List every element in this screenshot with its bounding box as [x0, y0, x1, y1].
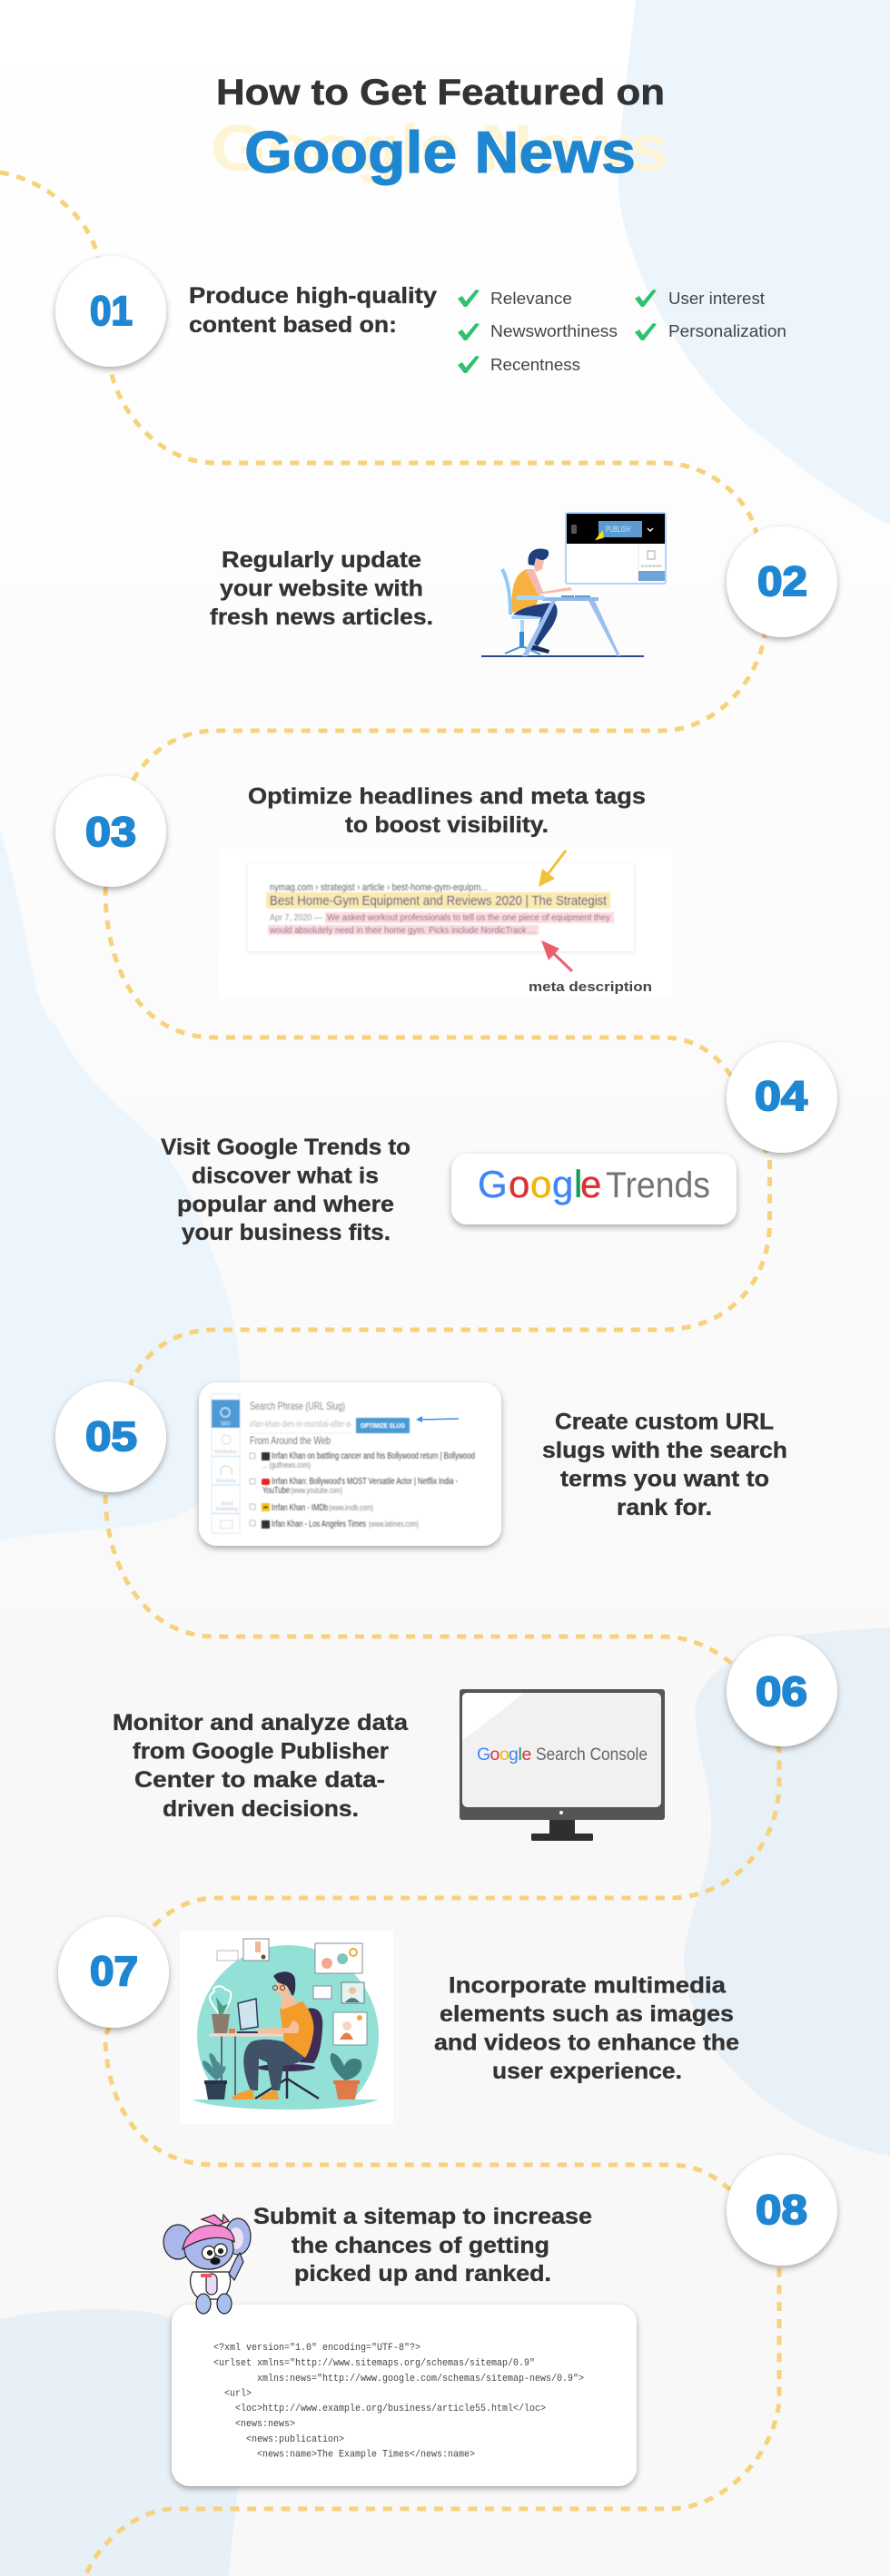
checklist [458, 290, 786, 374]
publish window: PUBLISH [606, 525, 630, 534]
step 02 text: your website with [220, 575, 423, 601]
checklist: Recentness [490, 356, 580, 374]
step 07 text: elements such as images [440, 2001, 734, 2027]
Google Trends logo card: Trends [606, 1165, 710, 1205]
monitor with Google Search Console: G [477, 1745, 490, 1765]
number badge 05 [55, 1381, 166, 1492]
Google Trends logo card: l [574, 1163, 582, 1205]
step 01 text: content based on: [189, 312, 397, 338]
step 05 text: Create custom URL [555, 1409, 774, 1434]
number badge 06 [727, 1636, 837, 1746]
number badge 02: 02 [757, 558, 807, 605]
publish window: Comments [641, 564, 663, 568]
title [211, 73, 669, 185]
sitemap code card: <loc>http://www.example.org/business/article55.html</loc> [235, 2404, 546, 2414]
monitor with Google Search Console [460, 1689, 665, 1841]
checklist: Newsworthiness [490, 322, 618, 340]
number badge 03 [55, 776, 166, 887]
search result screenshot [219, 849, 672, 998]
URL slug screenshot card: (www.youtube.com) [291, 1486, 342, 1495]
step 05 text [542, 1409, 787, 1520]
Google Trends logo card [451, 1154, 737, 1224]
step 04 text: your business fits. [182, 1220, 391, 1245]
step 06 text: from Google Publisher [133, 1739, 389, 1765]
monitor with Google Search Console: Search Console [536, 1745, 648, 1765]
step 03 text: to boost visibility. [345, 812, 549, 838]
number badge 07 [58, 1917, 169, 2028]
search result screenshot: Apr 7, 2020 — [270, 913, 322, 923]
Google Trends logo card: o [509, 1163, 529, 1205]
step 06 text: Monitor and analyze data [113, 1710, 409, 1735]
URL slug screenshot card: Irfan Khan - Los Angeles Times [272, 1519, 366, 1529]
step 05 text: rank for. [617, 1495, 712, 1520]
number badge 06: 06 [756, 1668, 807, 1715]
number badge 04 [727, 1042, 837, 1153]
step 07 text: user experience. [492, 2059, 682, 2084]
search result screenshot: nymag.com › strategist › article › best-home-gym-equipm... [270, 882, 488, 893]
illustration: person at desk [481, 549, 644, 656]
picture frames [217, 1939, 367, 2045]
number badge 01: 01 [90, 288, 133, 334]
Google Trends logo card: o [530, 1163, 551, 1205]
sitemap code card: <?xml version="1.0" encoding="UTF-8"?> [213, 2343, 420, 2354]
step 02 [210, 513, 837, 656]
number badge 07: 07 [90, 1948, 138, 1994]
step 02 text: fresh news articles. [210, 605, 433, 630]
title: Google News [211, 113, 669, 185]
URL slug screenshot card: From Around the Web [250, 1434, 331, 1447]
step 07 text: Incorporate multimedia [449, 1973, 727, 1999]
step 05 [55, 1381, 787, 1546]
arrow: blue [416, 1416, 459, 1422]
step 03 text: Optimize headlines and meta tags [248, 784, 646, 810]
URL slug screenshot card: Irrfan Khan on battling cancer and his Bollywood return | Bollywood [272, 1451, 475, 1461]
step 08 [163, 2155, 837, 2486]
URL slug screenshot card: (www.latimes.com) [369, 1519, 419, 1529]
number badge 05: 05 [85, 1413, 137, 1460]
step 04 text: popular and where [177, 1192, 394, 1217]
URL slug screenshot card: Discovery [216, 1479, 236, 1484]
number badge 04: 04 [755, 1073, 807, 1119]
monitor with Google Search Console: l [518, 1745, 522, 1765]
illustration: person at computer [180, 1931, 393, 2124]
step 08 text: picked up and ranked. [294, 2261, 551, 2286]
URL slug screenshot card: (www.imdb.com) [329, 1503, 373, 1512]
step 08 text: the chances of getting [292, 2233, 549, 2258]
monitor with Google Search Console: o [490, 1745, 499, 1765]
Google Trends logo card: G [478, 1163, 508, 1205]
step 04 text [161, 1135, 410, 1245]
URL slug screenshot card: Social [221, 1501, 233, 1507]
number badge 08: 08 [756, 2187, 807, 2233]
step 06 text: Center to make data- [134, 1767, 385, 1793]
checklist: Relevance [490, 290, 572, 308]
checklist: User interest [668, 290, 765, 308]
step 06 [113, 1636, 837, 1841]
laptop [237, 1999, 275, 2033]
label: meta description: meta description [529, 979, 652, 995]
sitemap code card: <news:news> [235, 2419, 295, 2430]
publish window [566, 513, 666, 584]
URL slug screenshot card [199, 1382, 501, 1546]
sitemap code card [172, 2305, 637, 2486]
step 01 [55, 256, 786, 374]
step 05 text: slugs with the search [542, 1438, 787, 1463]
arrow: red [541, 940, 572, 971]
URL slug screenshot card: ... (gulfnews.com) [262, 1460, 311, 1470]
sitemap code card: <news:name>The Example Times</news:name> [257, 2449, 475, 2460]
person [232, 1971, 313, 2099]
step 05 text: terms you want to [560, 1467, 769, 1492]
step 06 text [113, 1710, 409, 1822]
step 07 text: and videos to enhance the [434, 2030, 739, 2055]
search result screenshot: would absolutely need in their home gym. Picks include NordicTrack ... [269, 926, 536, 936]
monitor with Google Search Console: g [509, 1745, 519, 1765]
sitemap code card: <url> [224, 2389, 252, 2400]
number badge 01 [55, 256, 166, 367]
step 08 text: Submit a sitemap to increase [253, 2204, 592, 2229]
sitemap code card: <urlset xmlns="http://www.sitemaps.org/schemas/sitemap/0.9" [213, 2358, 535, 2369]
number badge 03: 03 [85, 809, 136, 855]
arrow: yellow [539, 850, 566, 887]
monitor with Google Search Console: e [521, 1745, 531, 1765]
desk [209, 2029, 304, 2099]
step 03 text [248, 784, 646, 838]
step 04 text: discover what is [192, 1164, 379, 1189]
chair [255, 2008, 322, 2099]
number badge 02 [727, 526, 837, 637]
step 01 text: Produce high-quality [189, 283, 437, 309]
URL slug screenshot card: OPTIMIZE SLUG [361, 1421, 405, 1430]
step 01 text [189, 283, 437, 338]
URL slug screenshot card: Search Phrase (URL Slug) [250, 1400, 345, 1412]
monitor with Google Search Console: o [499, 1745, 509, 1765]
step 07 text [434, 1973, 739, 2084]
URL slug screenshot card: Distribution [214, 1450, 237, 1455]
URL slug screenshot card: Irrfan Khan - IMDb [272, 1503, 328, 1513]
checklist: Personalization [668, 322, 786, 340]
step 08 text [253, 2204, 592, 2286]
sitemap code card: xmlns:news="http://www.google.com/schemas/sitemap-news/0.9"> [257, 2374, 584, 2384]
title: Google News [244, 119, 636, 185]
number badge 08 [727, 2155, 837, 2266]
Google Trends logo card: e [580, 1163, 601, 1205]
floor plants [203, 2053, 361, 2099]
title: How to Get Featured on [216, 73, 665, 113]
search result screenshot: We asked workout professionals to tell us the one piece of equipment they [327, 913, 610, 923]
search result screenshot: Best Home-Gym Equipment and Reviews 2020 | The Strategist [270, 893, 608, 909]
step 02 text: Regularly update [222, 547, 421, 573]
URL slug screenshot card: Scheduling [215, 1507, 238, 1512]
mascot [163, 2215, 251, 2314]
Google Trends logo card: g [552, 1163, 573, 1205]
step 06 text: driven decisions. [163, 1796, 359, 1822]
URL slug screenshot card: SEO [221, 1421, 231, 1427]
desk plant [210, 1986, 231, 2033]
step 02 text [210, 547, 433, 630]
URL slug screenshot card: Irrfan Khan: Bollywood's MOST Versatile Actor | Netflix India - [272, 1477, 458, 1487]
URL slug screenshot card: YouTube [262, 1486, 290, 1496]
URL slug screenshot card: irfan-khan-dies-in-mumbai-after-a- [250, 1420, 352, 1430]
step 03 [55, 776, 672, 998]
sitemap code card: <news:publication> [246, 2434, 344, 2445]
step 04 text: Visit Google Trends to [161, 1135, 410, 1160]
step 04 [161, 1042, 837, 1245]
step 07 [58, 1917, 739, 2124]
